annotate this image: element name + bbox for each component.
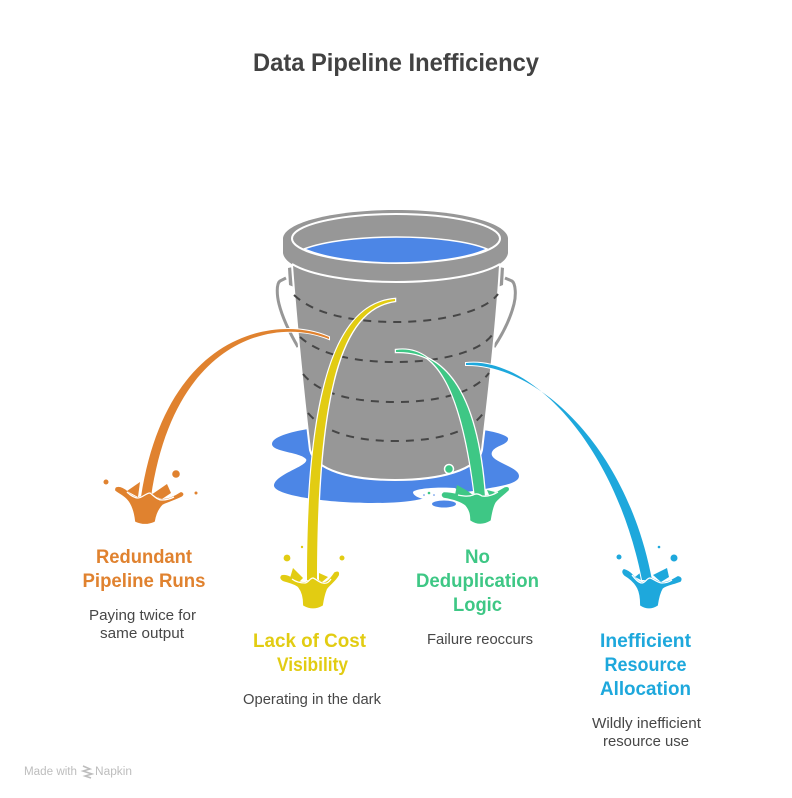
description: Wildly inefficient: [592, 716, 701, 750]
inner rim and water: [292, 214, 500, 263]
footer: Made with Napkin: Napkin: [95, 766, 132, 778]
description: Failure reoccurs: Failure reoccurs: [427, 632, 533, 648]
green stream and splash: [396, 350, 508, 523]
label: Inefficient Resource Allocation: Allocation: [600, 678, 691, 700]
description: Paying twice: Paying twice for: [89, 608, 196, 624]
bucket handle: [277, 278, 515, 347]
yellow stream and splash: [281, 299, 395, 608]
orange stream and splash: [104, 329, 329, 523]
bucket rim: [283, 210, 508, 283]
bucket body: [292, 265, 500, 480]
description: Wildly inefficient: Wildly inefficient: [592, 716, 701, 732]
label: Redundant Pipeline Runs: Redundant: [96, 546, 192, 568]
description: Wildly inefficient: resource use: [603, 734, 689, 750]
bucket dashed bands: [294, 294, 498, 441]
description: Paying twice: [89, 608, 196, 642]
label: Lack of Cost Visibility: Lack of Cost: [253, 630, 366, 652]
label: No Deduplication Logic: [416, 546, 539, 616]
icon: Napkin logo: [83, 766, 92, 778]
label: Redundant Pipeline Runs: Pipeline Runs: [82, 570, 206, 592]
description: Paying twice: same output: [100, 626, 184, 642]
footer: Made with Napkin: [24, 766, 132, 778]
label: Redundant Pipeline Runs: [82, 546, 206, 592]
label: No Deduplication Logic: Logic: [453, 594, 502, 616]
puddle: [272, 429, 519, 508]
bucket: [277, 210, 515, 480]
label: Inefficient Resource Allocation: [600, 630, 691, 700]
label: No Deduplication Logic: No: [465, 546, 490, 568]
title: Data Pipeline Inefficiency: [253, 49, 539, 77]
label: No Deduplication Logic: Deduplication: [416, 570, 539, 592]
blue stream and splash: [466, 363, 681, 608]
label: Lack of Cost Visibility: Visibility: [277, 654, 348, 676]
label: Inefficient Resource Allocation: Inefficient: [600, 630, 691, 652]
label: Inefficient Resource Allocation: Resource: [604, 654, 687, 676]
footer: Made with Napkin: Made with: [24, 766, 77, 778]
description: Operating in the dark: Operating in the dark: [243, 692, 382, 708]
label: Lack of Cost Visibility: [253, 630, 366, 676]
